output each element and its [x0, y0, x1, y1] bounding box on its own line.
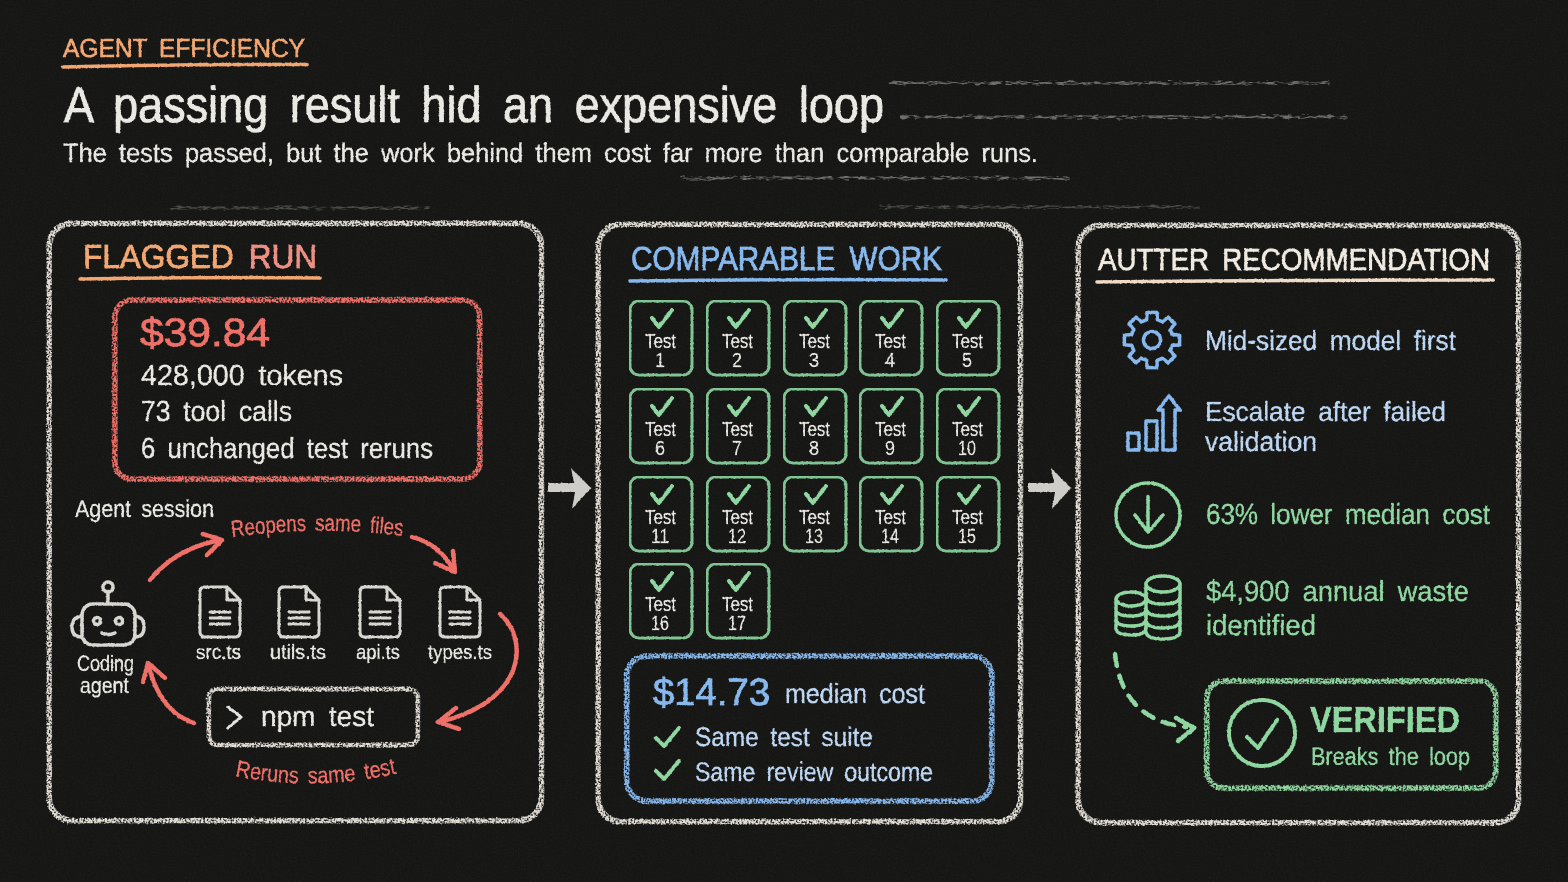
test 13: Test — [799, 507, 830, 529]
test 8: 8 — [809, 438, 819, 460]
header — [63, 33, 1038, 168]
test 3 — [784, 301, 846, 375]
test 10: Test — [952, 419, 983, 441]
test 10 — [937, 389, 999, 463]
arrow: terminal to agent — [143, 663, 194, 723]
label: reruns same test: Reruns same test — [236, 759, 397, 784]
text: mid-sized model first: Mid-sized model first — [1205, 325, 1456, 356]
icon: check circle — [1229, 700, 1295, 766]
text: annual waste identified — [1206, 576, 1469, 642]
test 2: Test — [722, 331, 753, 353]
test 14: 14 — [881, 526, 899, 548]
test 1 — [630, 301, 692, 375]
test 6: Test — [645, 419, 676, 441]
test 4: Test — [875, 331, 906, 353]
text: annual waste identified: identified — [1206, 610, 1316, 642]
test 5: 5 — [962, 350, 972, 372]
test 7: 7 — [732, 438, 742, 460]
test 11: Test — [645, 507, 676, 529]
icon: file utils.ts: utils.ts — [270, 642, 326, 664]
icon: file utils.ts — [270, 587, 326, 664]
icon: coding agent robot — [72, 582, 144, 645]
test 16: Test — [645, 594, 676, 616]
terminal prompt and command: npm test — [261, 701, 374, 733]
arrow: comparable to recommendation — [1028, 468, 1071, 509]
test 9: 9 — [885, 438, 895, 460]
arrow: flagged to comparable — [548, 468, 591, 509]
verified text: Breaks the loop — [1311, 743, 1470, 771]
test 13: 13 — [805, 526, 823, 548]
test 4 — [860, 301, 922, 375]
test 6: 6 — [655, 438, 665, 460]
test 7: Test — [722, 419, 753, 441]
panel border — [49, 223, 542, 821]
median cost text: Same review outcome — [695, 757, 933, 787]
text: escalate after failed validation — [1205, 396, 1446, 457]
test 16 — [630, 564, 692, 638]
test 8 — [784, 389, 846, 463]
test 13 — [784, 477, 846, 551]
panel: flagged run — [46, 220, 545, 824]
icon: file api.ts — [356, 587, 400, 664]
label: coding agent — [77, 651, 134, 698]
test 11: 11 — [651, 526, 669, 548]
test 16: 16 — [651, 613, 669, 635]
badge: verified — [1207, 681, 1496, 788]
subtitle: The tests passed, but the work behind them cost far more than comparable runs. — [63, 138, 1038, 168]
icon: down arrow circle — [1116, 483, 1180, 547]
arrow: dashed to verified — [1115, 654, 1194, 741]
test 14: Test — [875, 507, 906, 529]
test 1: 1 — [655, 350, 665, 372]
arrow: files to terminal — [438, 614, 517, 729]
test 4: 4 — [885, 350, 895, 372]
test 8: Test — [799, 419, 830, 441]
arrow: into types.ts — [412, 537, 455, 572]
terminal box — [209, 689, 418, 745]
test 3: 3 — [809, 350, 819, 372]
median cost text: $14.73 — [653, 672, 770, 714]
label: reopens same files: Reopens same files — [231, 516, 403, 538]
panel: autter recommendation — [1078, 225, 1519, 823]
stat text: 6 unchanged test reruns — [141, 433, 433, 465]
median cost text — [653, 672, 933, 787]
verified box — [1207, 681, 1496, 788]
test 14 — [860, 477, 922, 551]
icon: file src.ts — [196, 587, 241, 664]
panel: comparable work — [598, 224, 1021, 822]
icon: file types.ts — [428, 587, 492, 664]
verified text: VERIFIED — [1310, 699, 1460, 740]
icon: gear — [1124, 312, 1180, 368]
blue box — [627, 656, 992, 801]
panel border — [598, 224, 1021, 822]
median cost text: Same test suite — [695, 722, 873, 752]
test 2 — [707, 301, 769, 375]
test 5: Test — [952, 331, 983, 353]
heading: autter recommendation: AUTTER RECOMMENDATION — [1098, 242, 1490, 277]
test 9 — [860, 389, 922, 463]
test 15 — [937, 477, 999, 551]
test 12: 12 — [728, 526, 746, 548]
callout: run cost stats — [115, 300, 480, 479]
heading: flagged run: FLAGGED RUN — [83, 238, 317, 275]
red stat box — [115, 300, 480, 479]
icon: file types.ts: types.ts — [428, 642, 492, 664]
test 2: 2 — [732, 350, 742, 372]
title: A passing result hid an expensive loop — [64, 77, 884, 133]
label: coding agent: agent — [80, 673, 129, 698]
heading: comparable work: COMPARABLE WORK — [631, 240, 942, 277]
label: agent session: Agent session — [75, 496, 214, 523]
test 12 — [707, 477, 769, 551]
label: coding agent: Coding — [77, 651, 134, 676]
test 15: 15 — [958, 526, 976, 548]
icon: rising bars with arrow — [1128, 396, 1180, 450]
panel border — [1078, 225, 1519, 823]
test 17 — [707, 564, 769, 638]
test 17: Test — [722, 594, 753, 616]
text: 63% lower median cost: 63% lower median cost — [1206, 499, 1490, 531]
stat text — [140, 311, 433, 465]
test 6 — [630, 389, 692, 463]
callout: median cost — [627, 656, 992, 801]
terminal: npm test — [209, 689, 418, 745]
icon: coin stacks — [1116, 576, 1180, 639]
text: annual waste identified: $4,900 annual waste — [1206, 576, 1469, 608]
stat text: 73 tool calls — [141, 396, 292, 428]
test 17: 17 — [728, 613, 746, 635]
test grid — [630, 301, 999, 638]
text: escalate after failed validation: Escalate after failed — [1205, 396, 1446, 427]
test 9: Test — [875, 419, 906, 441]
test 1: Test — [645, 331, 676, 353]
icon: file api.ts: api.ts — [356, 642, 400, 664]
stat text: $39.84 — [140, 311, 270, 355]
test 10: 10 — [958, 438, 976, 460]
icon: file src.ts: src.ts — [196, 642, 241, 664]
eyebrow: agent efficiency: AGENT EFFICIENCY — [63, 33, 305, 63]
stat text: 428,000 tokens — [141, 360, 343, 392]
median cost text: median cost — [785, 678, 925, 709]
test 15: Test — [952, 507, 983, 529]
text: escalate after failed validation: validation — [1205, 426, 1317, 457]
eyebrow underline — [63, 64, 307, 67]
test 12: Test — [722, 507, 753, 529]
test 11 — [630, 477, 692, 551]
verified text — [1310, 699, 1470, 771]
test 7 — [707, 389, 769, 463]
test 3: Test — [799, 331, 830, 353]
arrow: agent to files — [150, 534, 222, 580]
test 5 — [937, 301, 999, 375]
